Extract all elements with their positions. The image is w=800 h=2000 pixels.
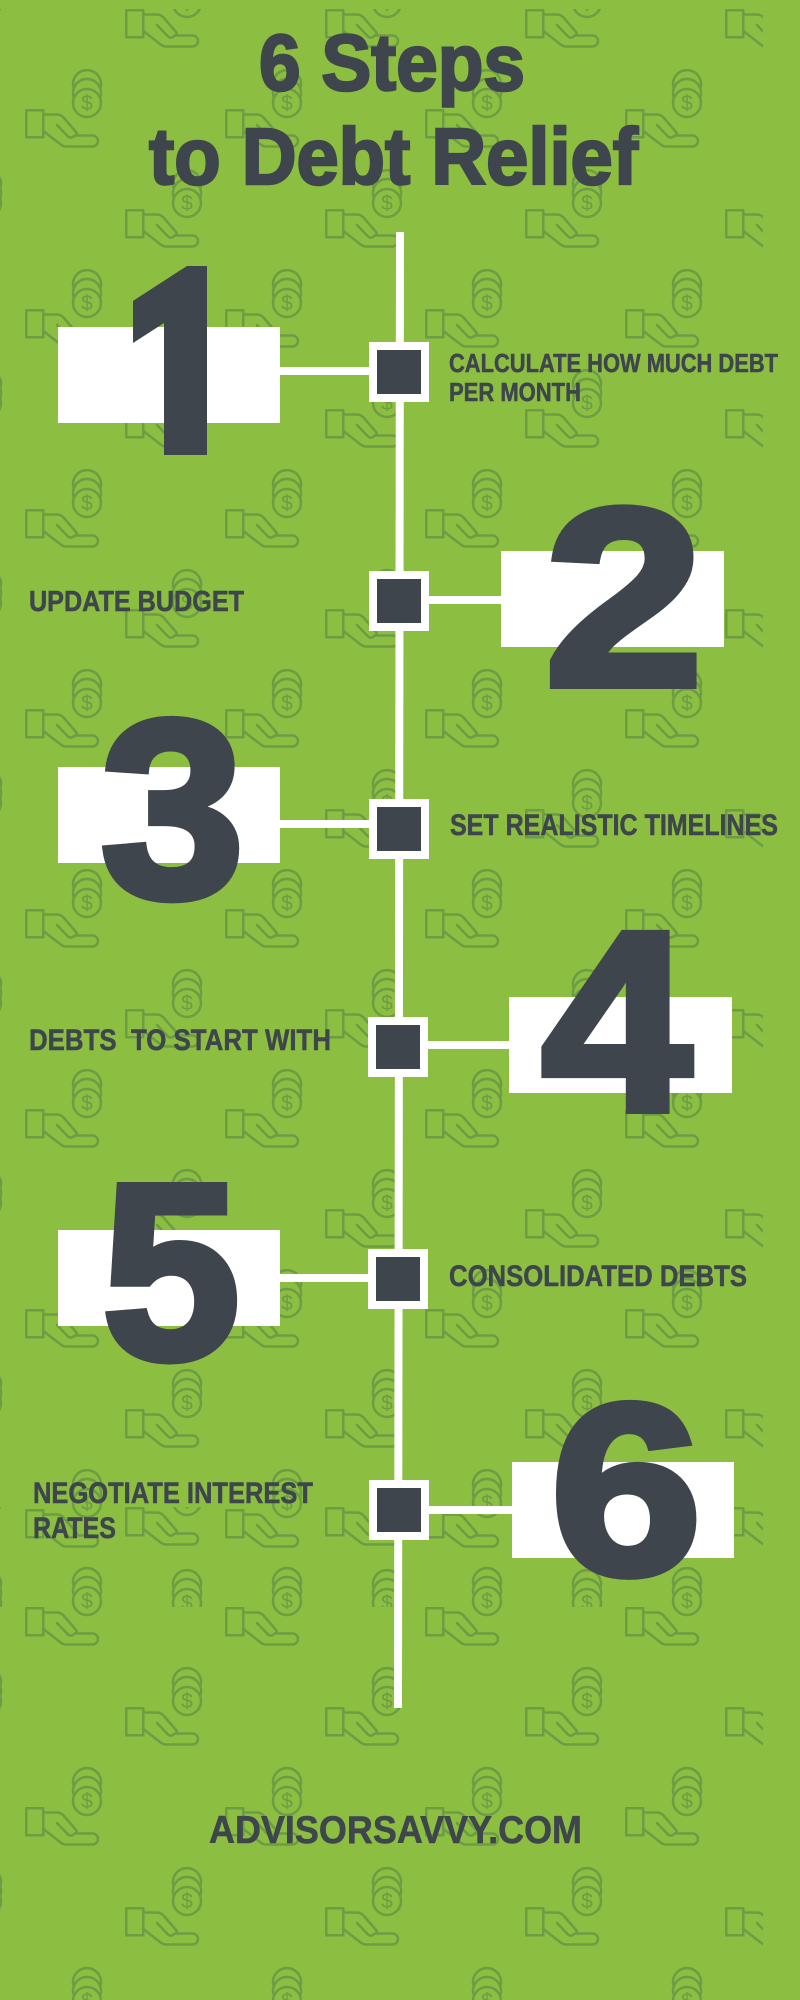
step 5 white banner — [58, 1230, 280, 1326]
step 1 white banner — [58, 327, 280, 423]
step 1 label — [449, 348, 778, 407]
step 3 connector — [280, 820, 370, 828]
step 6 label — [33, 1477, 313, 1545]
step 3 — [58, 668, 778, 951]
title: to Debt Relief — [149, 112, 638, 201]
step 5 label: CONSOLIDATED DEBTS — [449, 1260, 747, 1293]
background pattern: hands and coins, lower — [0, 1507, 763, 2000]
title: 6 Steps — [259, 18, 525, 107]
step 6 label: NEGOTIATE INTEREST — [33, 1477, 313, 1510]
step 3 node — [373, 803, 425, 855]
step 6 node — [373, 1484, 425, 1536]
step 4 node — [372, 1021, 424, 1073]
step 1 number: 1 — [88, 211, 288, 508]
step 4 number: 4 — [542, 878, 693, 1165]
step 2 white banner — [501, 551, 724, 647]
step 5 node — [372, 1253, 424, 1305]
step 2 node — [373, 575, 425, 627]
step 2 label: UPDATE BUDGET — [29, 586, 244, 618]
step 6 connector — [428, 1506, 512, 1514]
step 6 number: 6 — [550, 1354, 702, 1625]
step 6 white banner — [512, 1462, 734, 1558]
step 6 — [33, 1354, 734, 1625]
step 5 connector — [280, 1274, 369, 1282]
step 4 connector — [427, 1041, 509, 1049]
step 2 connector — [428, 596, 501, 604]
timeline vertical line — [394, 232, 404, 1708]
step 5 number: 5 — [102, 1131, 240, 1411]
step 1 node — [373, 346, 425, 398]
step 1 label: PER MONTH — [449, 377, 581, 407]
step 3 white banner — [58, 767, 280, 863]
step 2 — [29, 457, 724, 739]
step 1 — [58, 266, 778, 455]
step 4 white banner — [509, 997, 732, 1093]
step 6 label: RATES — [33, 1512, 116, 1545]
step 3 number: 3 — [100, 668, 244, 951]
step 1 connector — [280, 367, 370, 375]
footer website: ADVISORSAVVY.COM — [209, 1809, 582, 1852]
background pattern: hands and coins, upper — [0, 9, 763, 1607]
step 4 label: DEBTS TO START WITH — [29, 1024, 331, 1057]
step 4 — [29, 878, 732, 1165]
title — [149, 18, 638, 201]
step 2 number: 2 — [544, 457, 704, 739]
step 5 — [58, 1131, 747, 1411]
